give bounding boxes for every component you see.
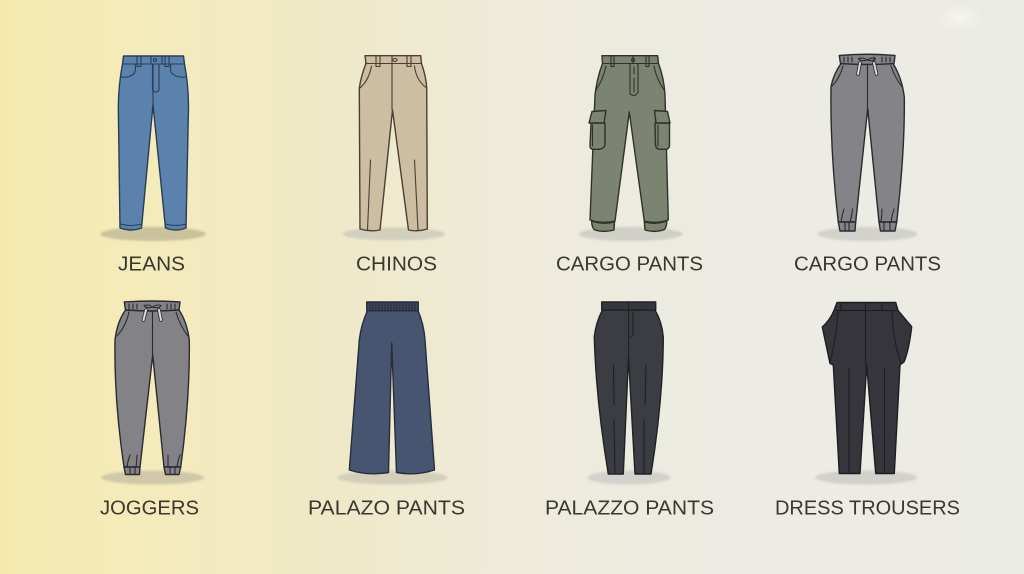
icon: cargo pants gray <box>831 54 904 231</box>
label: cargo pants olive: CARGO PANTS <box>556 254 703 276</box>
shadow: joggers <box>101 470 204 484</box>
icon: dress trousers <box>822 302 912 474</box>
item: jeans <box>100 56 206 241</box>
shadow: cargo pants olive <box>579 227 683 241</box>
label: cargo pants gray: CARGO PANTS <box>794 254 941 276</box>
icon: cargo pants olive <box>589 56 670 231</box>
item: joggers <box>101 301 204 484</box>
icon: palazo pants <box>349 302 434 474</box>
shadow: palazo pants <box>337 470 448 484</box>
light glare <box>936 4 984 32</box>
label: jeans: JEANS <box>118 254 185 276</box>
label: palazo pants: PALAZO PANTS <box>308 498 465 520</box>
label: joggers: JOGGERS <box>100 498 199 520</box>
icon: jeans <box>118 56 188 230</box>
label: dress trousers: DRESS TROUSERS <box>775 498 960 520</box>
shadow: dress trousers <box>815 470 917 484</box>
item: chinos <box>343 56 445 241</box>
item: palazo pants <box>337 302 448 484</box>
icon: palazzo pants <box>594 302 663 474</box>
icon: joggers <box>115 301 189 474</box>
label: palazzo pants: PALAZZO PANTS <box>545 498 714 520</box>
shadow: chinos <box>343 228 445 240</box>
item: cargo pants gray <box>818 54 918 241</box>
item: palazzo pants <box>588 302 670 484</box>
item: cargo pants olive <box>579 56 683 241</box>
label: chinos: CHINOS <box>356 254 437 276</box>
shadow: palazzo pants <box>588 470 670 484</box>
shadow: jeans <box>100 227 206 241</box>
icon: chinos <box>359 56 427 231</box>
shadow: cargo pants gray <box>818 227 918 241</box>
item: dress trousers <box>815 302 917 484</box>
